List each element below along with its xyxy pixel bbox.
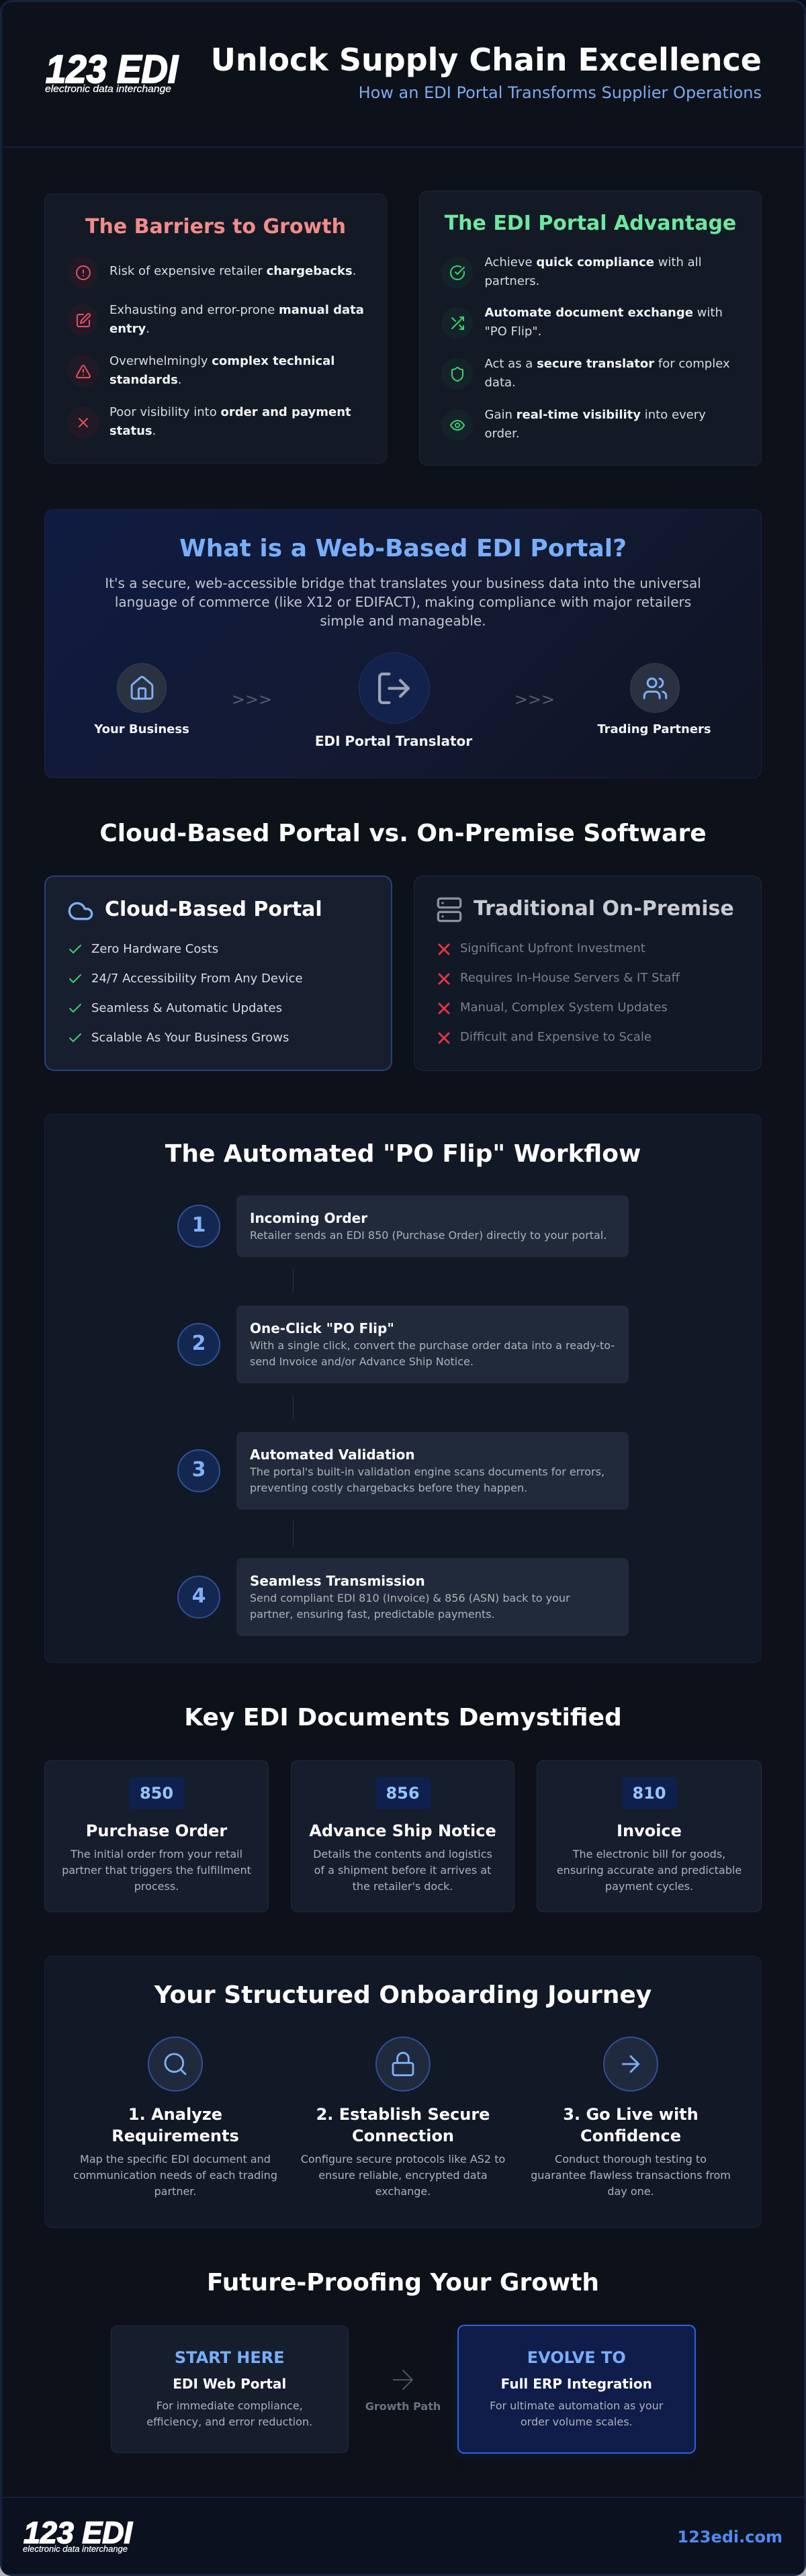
description [313,1848,492,1892]
heading: Traditional On-Premise [474,897,734,920]
icon: alert circle [67,257,99,288]
panel: traditional on-premise [414,875,762,1071]
step 3 description: Conduct thorough testing to [555,2153,707,2165]
step 4 card: Send compliant EDI 810 (Invoice) & 856 (ASN) back to your [250,1591,570,1604]
step 1 description: Map the specific EDI document and [80,2153,271,2165]
heading: key EDI documents: Key EDI Documents Demystified [184,1704,622,1731]
description: efficiency, and error reduction. [146,2415,312,2428]
description: ensuring accurate and predictable [557,1864,742,1876]
step 3 title: 3. Go Live with [563,2105,699,2124]
item: Requires In-House Servers & IT Staff [460,971,680,985]
card: 850 purchase order [44,1760,269,1912]
logo: 123 EDI: electronic data interchange [45,83,171,95]
badge: 856 [386,1784,420,1803]
text: poor visibility: status. [109,424,156,438]
text: chargebacks: Risk of expensive retailer chargebacks. [109,264,356,278]
step 3 card [236,1432,629,1510]
title: Advance Ship Notice [309,1821,496,1840]
icon: portal [359,652,430,724]
description: payment cycles. [605,1880,693,1892]
text: poor visibility: Poor visibility into order and payment [109,405,351,419]
label: START HERE [175,2348,285,2367]
label: Your Business [94,722,189,736]
step 2 title: Connection [352,2127,454,2145]
icon: check circle [441,257,473,288]
description: order volume scales. [521,2415,633,2428]
title: EDI Web Portal [173,2376,286,2392]
item: Significant Upfront Investment [460,941,645,955]
step 3 card: Automated Validation [250,1447,415,1463]
text: automate exchange: "PO Flip". [485,325,541,339]
text: manual data entry [109,303,364,336]
step 2 card: With a single click, convert the purchase order data into a ready-to- [250,1339,615,1352]
text: real-time visibility: Gain real-time visibility into every [485,408,706,422]
heading: The Automated "PO Flip" Workflow [165,1140,641,1168]
text: real-time visibility: order. [485,427,520,441]
text: quick compliance: Achieve quick compliance with all [485,255,702,269]
heading: future-proofing: Future-Proofing Your Growth [207,2269,599,2296]
badge [622,1777,677,1809]
icon: arrow [387,2364,419,2396]
description [557,1848,742,1892]
text: secure translator: data. [485,376,516,390]
step 1 title: 1. Analyze [128,2105,222,2124]
item: Seamless & Automatic Updates [91,1001,282,1015]
description: of a shipment before it arrives at [314,1864,491,1876]
description: For immediate compliance, [156,2399,303,2412]
text: automate exchange [485,306,723,339]
description: the retailer's dock. [353,1880,453,1892]
step 3 title: Confidence [580,2127,681,2145]
description: Details the contents and logistics [313,1848,492,1860]
list: benefits [69,942,303,1045]
icon: eye [441,409,473,441]
header [2,42,804,148]
card: 810 invoice [537,1760,762,1912]
step 1 card: Retailer sends an EDI 850 (Purchase Order) directly to your portal. [250,1229,607,1242]
description: process. [134,1880,179,1892]
step 4 card: Seamless Transmission [250,1572,425,1588]
step 3 card: preventing costly chargebacks before they happen. [250,1482,527,1494]
heading: What is a Web-Based EDI Portal? [179,535,627,562]
badge [375,1777,430,1809]
icon: server [437,898,462,922]
text: manual data entry: entry. [109,322,150,336]
description [62,1848,251,1892]
step 1 title: Requirements [111,2127,239,2145]
step 2 card: One-Click "PO Flip" [250,1320,394,1336]
node: trading partners [597,663,711,736]
description: partner that triggers the fulfillment [62,1864,251,1876]
icon: arrow right [603,2036,658,2092]
badge: 810 [632,1784,666,1803]
panel: what is a web-based EDI portal [44,509,762,778]
card: start here [110,2325,349,2453]
list: drawbacks [438,941,680,1044]
icon: home [117,663,167,713]
heading: cloud vs on-premise: Cloud-Based Portal vs. On-Premise Software [99,820,707,847]
description [105,575,701,629]
website: 123edi.com [677,2528,782,2546]
growth path arrow [363,2364,443,2416]
badge [129,1777,184,1809]
item: 24/7 Accessibility From Any Device [91,972,303,986]
icon: shield [441,358,473,390]
icon: cloud [69,902,93,920]
step 3 description [523,2151,738,2200]
icon: x [67,406,99,438]
title: Invoice [617,1821,682,1840]
subtitle: How an EDI Portal Transforms Supplier Operations [359,83,762,102]
step 3 card: The portal's built-in validation engine scans documents for errors, [250,1465,604,1478]
label: EVOLVE TO [527,2348,626,2367]
step 2 description: Configure secure protocols like AS2 to [301,2153,505,2165]
panel: barriers to growth [44,194,387,464]
step 3 description: guarantee flawless transactions from [531,2169,731,2181]
step number 3 [177,1449,220,1492]
step number 2: 2 [192,1332,206,1355]
icon: warning triangle [67,355,99,387]
node: your business [94,663,189,736]
description: simple and manageable. [320,613,486,629]
description [457,2398,696,2430]
footer logo: electronic data interchange [23,2544,128,2554]
badge: 850 [140,1784,173,1803]
step 3 title [523,2104,738,2147]
step 2 description: exchange. [375,2185,431,2197]
item: Manual, Complex System Updates [460,1000,668,1015]
footer [2,2497,804,2574]
step number 4 [177,1575,220,1618]
text: automate exchange: Automate document exchange with [485,306,723,320]
step number 1 [177,1205,220,1248]
node: EDI portal translator [315,652,473,749]
icon: shuffle [441,307,473,339]
heading: barriers: The Barriers to Growth [85,215,346,239]
text: quick compliance [485,255,702,288]
label: EDI Portal Translator [315,733,472,749]
step 1 description: communication needs of each trading [73,2169,277,2181]
arrow: >>> [232,690,272,709]
description: It's a secure, web-accessible bridge that translates your business data into the universal [105,575,701,591]
step number 1: 1 [192,1213,206,1237]
description: language of commerce (like X12 or EDIFACT), making compliance with major retailers [115,594,691,610]
heading: Your Structured Onboarding Journey [154,1981,652,2009]
description: The initial order from your retail [71,1848,242,1860]
title: Full ERP Integration [501,2376,652,2392]
text: secure translator: Act as a secure translator for complex [485,357,730,371]
step 4 card: partner, ensuring fast, predictable payments. [250,1607,495,1621]
step number 3: 3 [192,1458,206,1481]
step 1 description [68,2151,283,2200]
heading: advantage: The EDI Portal Advantage [445,212,736,235]
panel: PO flip workflow [44,1114,762,1663]
item: Zero Hardware Costs [91,942,218,956]
step number 2 [177,1322,220,1365]
text: manual data entry: Exhausting and error-prone manual data [109,303,364,317]
step 2 title [296,2104,510,2147]
icon: lock [375,2036,431,2092]
step 1 title [111,2105,239,2145]
text: secure translator [485,357,730,390]
step 1 card [236,1195,629,1257]
step 4 card [236,1557,629,1636]
item: Difficult and Expensive to Scale [460,1030,652,1044]
label: Growth Path [365,2400,441,2413]
label: Trading Partners [597,722,711,736]
step 1 description: partner. [154,2185,196,2197]
card: 856 advance ship notice [291,1760,514,1912]
text: complex standards: Overwhelmingly complex technical [109,354,334,368]
text: poor visibility [109,405,351,438]
card: evolve to [457,2325,696,2454]
item: Scalable As Your Business Grows [91,1031,289,1045]
arrow: >>> [514,690,555,709]
panel: onboarding journey [44,1956,762,2228]
text: complex standards: standards. [109,373,182,387]
text: complex standards [109,354,334,387]
title: Unlock Supply Chain Excellence [211,42,762,78]
step number 4: 4 [192,1584,206,1607]
description [110,2398,349,2430]
icon: users [630,663,680,713]
step 1 card: Incoming Order [250,1210,367,1226]
step 2 description [296,2151,510,2200]
description: The electronic bill for goods, [573,1848,725,1860]
step 2 card: send Invoice and/or Advance Ship Notice. [250,1355,474,1368]
panel: EDI portal advantage [419,191,762,466]
icon: edit [67,304,99,336]
step 3 description: day one. [607,2185,654,2197]
description: For ultimate automation as your [490,2399,663,2412]
text: real-time visibility [485,408,706,441]
title: Purchase Order [86,1821,227,1840]
heading: Cloud-Based Portal [105,898,322,921]
text: quick compliance: partners. [485,274,539,288]
step 2 title: 2. Establish Secure [316,2105,490,2124]
panel: cloud-based portal [44,875,392,1071]
step 2 card [236,1305,629,1383]
icon: search [148,2036,203,2092]
step 2 description: ensure reliable, encrypted data [318,2169,488,2181]
